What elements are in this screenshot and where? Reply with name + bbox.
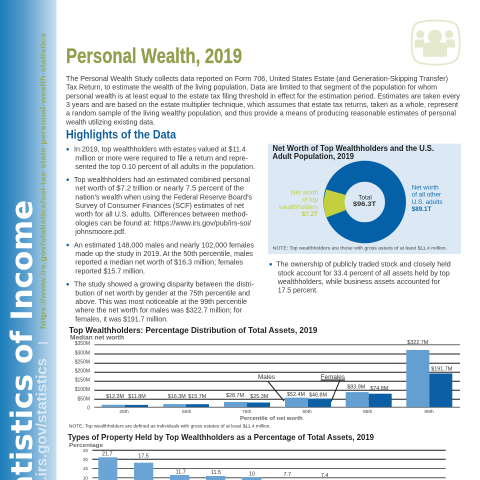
bullets: left column: reported $15.7 million. — [75, 266, 145, 275]
gridlines and y axis: 20 — [83, 457, 88, 462]
value labels: $12.3M — [106, 394, 124, 400]
callout: females — [320, 373, 346, 402]
value labels: $15.7M — [188, 394, 207, 400]
value labels: $191.7M — [431, 367, 453, 373]
bar value labels: 7.4 — [321, 473, 328, 479]
x axis labels: 50th — [182, 409, 192, 415]
bullets: left column: Top wealthholders had an estimated combined personal — [74, 175, 250, 184]
label: all other adults: U.S. adults — [412, 199, 443, 206]
heading: highlights: Highlights of the Data — [66, 130, 177, 142]
gridlines and y axis: $100M — [75, 387, 90, 393]
bullet: right column: wealthholders, while business assets accounted for — [277, 277, 441, 286]
value labels: $83.9M — [347, 385, 366, 391]
x axis labels: 25th — [119, 409, 129, 415]
x axis labels — [119, 409, 434, 415]
gridlines and y axis: $300M — [75, 350, 90, 356]
gridlines and y axis: $200M — [75, 369, 90, 375]
gridlines and y axis: $50M — [77, 396, 90, 402]
bullets: left column: Survey of Consumer Finances (SCF) estimates of net — [75, 201, 244, 210]
donut centre total: $96.3T — [353, 201, 376, 208]
label: all other adults: of all other — [412, 192, 441, 199]
axis title: Median net worth — [70, 334, 124, 342]
bullets: left column: net worth of $7.2 trillion or nearly 7.5 percent of the — [75, 184, 244, 193]
callout: males — [257, 373, 284, 401]
donut note: NOTE: Top wealthholders are those with gross assets of at least $11.4 million. — [273, 246, 447, 252]
label: top wealthholders: of top — [302, 197, 318, 204]
bullets: left column: The study showed a growing disparity between the distri- — [74, 280, 255, 289]
bar value labels: 11.5 — [211, 470, 221, 476]
gridlines and y axis: $350M — [75, 341, 90, 347]
x axis labels: 75th — [242, 409, 252, 415]
intro paragraph — [65, 74, 460, 126]
bar value labels: 21.7 — [102, 452, 113, 458]
callout: males: Males — [258, 374, 275, 381]
label: top wealthholders — [278, 190, 318, 218]
label: top wealthholders: wealthholders — [278, 204, 318, 211]
bullets: left column: ologies can be found at: https://www.irs.gov/pub/irs-soi/ — [75, 218, 251, 227]
bar value labels: 7.7 — [284, 472, 291, 478]
bullets: left column: females, it was $191.7 million. — [75, 314, 168, 323]
x axis title: Percentile of net worth — [240, 416, 303, 422]
intro paragraph: wealth utilizing existing data. — [65, 117, 155, 126]
bullets: left column: nation's wealth when using the Federal Reserve Board's — [75, 192, 252, 201]
x axis labels: 99th — [424, 409, 434, 415]
value labels: $322.7M — [407, 340, 429, 346]
bar value labels — [102, 452, 328, 479]
bullets: left column: bution of net worth by gender at the 75th percentile and — [75, 288, 250, 297]
bar chart: median net worth — [70, 334, 460, 422]
bar value labels: 10 — [249, 472, 255, 478]
bars: males — [102, 350, 429, 407]
donut chart — [324, 171, 396, 233]
bullets: left column: million or more were required to file a return and repre- — [75, 153, 249, 162]
donut centre total: Total — [358, 194, 372, 201]
panel heading: Net Worth of Top Wealthholders and the U.S. — [272, 144, 434, 153]
bullets: left column: reported a median net worth of $16.3 million; females — [75, 258, 243, 267]
bullets: left column: sented the top 0.10 percent of all adults in the population. — [75, 162, 255, 171]
label: top wealthholders: $7.2T — [302, 211, 318, 218]
value labels: $25.3M — [250, 394, 269, 400]
bars: females — [125, 374, 452, 407]
sidebar: Statistics of Income — [0, 0, 56, 480]
intro paragraph: 3 years and are based on the estate multiplier technique, which assumes that estate tax returns, taken as a whole, represent — [66, 100, 458, 109]
intro paragraph: Tax Return, to estimate the wealth of the living population. Data are limited to that segment of the population for whom — [66, 83, 437, 92]
bar chart: property types — [69, 443, 446, 480]
gridlines and y axis: 0 — [87, 406, 90, 412]
chart note: NOTE: Top wealthholders are defined as individuals with gross estates of at least $11.4 million. — [69, 424, 271, 430]
value labels: $46.8M — [309, 392, 327, 398]
bar value labels: 17.5 — [138, 454, 149, 460]
axis title: Percentage — [69, 443, 104, 449]
bullets: left column: In 2019, top wealthholders with estates valued at $11.4 — [74, 145, 246, 154]
gridlines and y axis — [75, 341, 460, 412]
bullet: right column: stock account for 33.4 percent of all assets held by top — [278, 268, 450, 277]
heading: property types chart: Types of Property Held by Top Wealthholders as a Percentage of Total Assets, 2019 — [68, 432, 374, 442]
bars — [98, 457, 261, 480]
x axis labels: 90th — [302, 409, 312, 415]
x axis labels: 95th — [363, 409, 373, 415]
bar value labels: 11.7 — [176, 470, 186, 476]
value labels: $74.8M — [370, 386, 389, 392]
bullets: left column: johnsmoore.pdf. — [74, 227, 126, 236]
bullet: right column: 17.5 percent. — [278, 286, 318, 295]
bullets: left column: An estimated 148,000 males and nearly 102,000 females — [74, 240, 254, 249]
gridlines and y axis: 15 — [83, 466, 88, 471]
bullets: left column — [66, 145, 255, 323]
bullets: left column: where the net worth for males was $322.7 million; for — [74, 306, 243, 315]
panel heading — [272, 144, 434, 161]
heading: distribution chart: Top Wealthholders: Percentage Distribution of Total Assets, 2019 — [69, 325, 317, 335]
intro paragraph: The Personal Wealth Study collects data reported on Form 706, United States Estate (and Generation-Skipping Transfer) — [66, 74, 448, 83]
value labels: $52.4M — [287, 392, 305, 398]
callout: females: Females — [321, 374, 345, 381]
label: all other adults: $89.1T — [412, 206, 431, 213]
value labels: $28.7M — [226, 393, 244, 399]
intro paragraph: a random sample of the living wealthy population, and thus provide a means of producing reasonable estimates of personal — [66, 109, 456, 118]
value labels: $11.8M — [128, 394, 146, 400]
panel heading: Adult Population, 2019 — [272, 152, 355, 161]
label: top wealthholders: Net worth — [291, 190, 318, 196]
bullets: left column: worth for all U.S. adults. Differences between method- — [74, 210, 249, 219]
gridlines and y axis — [83, 448, 446, 480]
sidebar link: https://www.irs.gov/statistics/soi-tax-stats-personal-wealth-statistics — [40, 33, 48, 329]
bullets: left column: made up the study in 2019. At the 50th percentile, males — [75, 249, 253, 258]
bullet: right column: The ownership of publicly traded stock and closely held — [276, 260, 451, 269]
label: all other adults — [412, 185, 443, 213]
panel: net worth donut — [268, 144, 461, 254]
title: Personal Wealth, 2019 — [66, 45, 242, 68]
gridlines and y axis: $250M — [75, 360, 90, 366]
icon: people — [412, 20, 460, 65]
label: all other adults: Net worth — [412, 185, 439, 192]
value labels — [106, 340, 453, 400]
donut centre total — [353, 194, 376, 208]
bullet: right column — [269, 260, 451, 295]
bullets: left column: above. This was most noticeable at the 99th percentile — [75, 297, 247, 306]
intro paragraph: personal wealth is at least equal to the estate tax filing threshold in effect for the estimation period. Estimates are taken every — [66, 91, 460, 100]
gridlines and y axis: $150M — [75, 378, 90, 384]
sidebar separator — [38, 342, 48, 344]
gridlines and y axis: 25 — [83, 448, 88, 453]
value labels: $16.3M — [168, 394, 186, 400]
